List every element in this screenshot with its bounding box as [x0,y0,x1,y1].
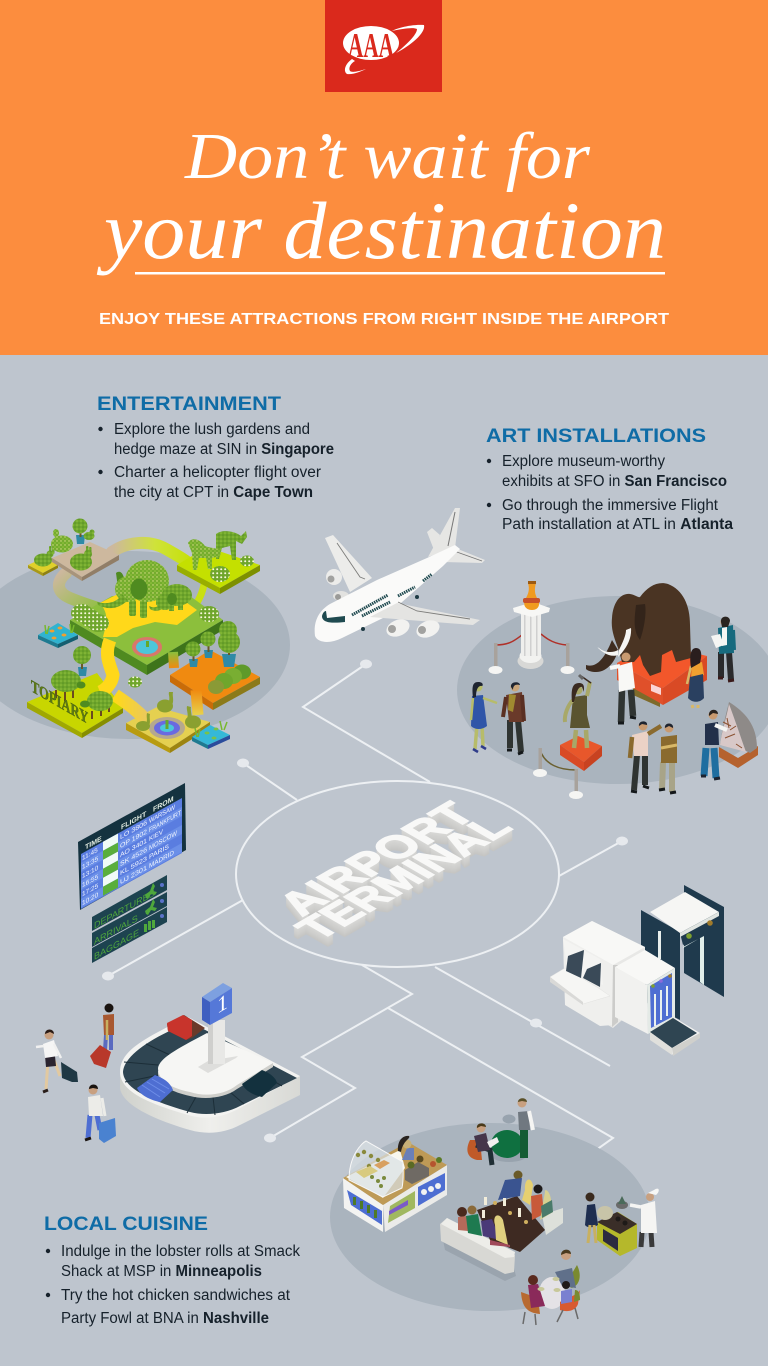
title: your destination [97,185,666,276]
panel: topiary garden [0,518,290,753]
title [97,120,666,276]
wayfinding signs: DEPARTURES [94,888,155,932]
flight departures board: 13:35 [82,856,98,871]
panel: food court [330,1098,659,1325]
flight departures board [78,783,186,910]
flight departures board: FRANKFURT [149,810,182,834]
flight departures board: AO 3401 [120,838,147,859]
wayfinding signs: BAGGAGE [94,927,139,963]
mammoth plinth [617,643,707,707]
art backdrop ellipse [457,596,768,784]
food backdrop ellipse [330,1123,650,1311]
text block: art installations: exhibits at SFO in San Francisco [502,473,727,490]
visitor: man at rock [701,710,727,779]
cavewoman statue on plinth [560,675,602,771]
airplane [315,508,485,642]
text block: local cuisine [44,1214,300,1327]
waiter and green table [467,1098,533,1165]
header band [0,0,768,355]
flight departures board: 11:45 [82,847,98,862]
flight departures board: OP 1902 [120,829,147,850]
flight departures board: 16:55 [82,874,98,889]
horse platform [177,547,260,588]
column with vase [513,581,550,669]
flight departures board: MADRID [149,850,174,870]
text block: local cuisine: LOCAL CUISINE [44,1214,208,1235]
flight departures board: FLIGHT [121,809,147,832]
panel: art installations [457,581,768,799]
text block: art installations: Path installation at ATL in Atlanta [502,516,733,533]
text block: entertainment: hedge maze at SIN in Singapore [114,441,334,458]
text block: art installations: ART INSTALLATIONS [486,426,706,447]
metal detector gate [641,885,724,1020]
elephants [97,560,192,618]
visitor: woman in orange top [687,648,704,708]
subtitle: ENJOY THESE ATTRACTIONS FROM RIGHT INSIDE THE AIRPORT [99,311,669,328]
family table [521,1250,580,1325]
water tiles [38,623,230,749]
rabbits [34,529,94,570]
group table on sofas [440,1170,563,1281]
flight departures board: 13:10 [82,865,98,880]
isometric label: airport: AIRPORT [266,795,486,922]
topiary ducks [136,692,201,731]
bakery counter [343,1136,447,1232]
text block: art installations [486,426,733,533]
flight departures board: 10:20 [82,892,98,907]
flight departures board: 17:25 [82,883,98,898]
text block: entertainment: Charter a helicopter flight over [114,464,321,481]
text block: local cuisine: Try the hot chicken sandwiches at [61,1287,291,1304]
security x-ray and gate [550,885,724,1056]
visitor: man in teal jacket [711,617,734,681]
orange platform [170,650,260,703]
bushes and trees [71,518,254,694]
flight departures board: MOSCOW [149,830,177,852]
title: Don’t wait for [184,120,590,193]
flight departures board: PARIS [149,843,169,861]
flight departures board: WARSAW [149,804,175,825]
AAA logo: AAA [348,26,394,65]
stanchions and ropes [488,634,583,799]
text block: entertainment: ENTERTAINMENT [97,394,281,415]
traveler: man with blue suitcase [85,1084,116,1143]
text block: art installations: Go through the immersive Flight [502,497,719,514]
text block: local cuisine: Indulge in the lobster rolls at Smack [61,1243,300,1260]
traveler: woman with dark suitcase [36,1030,78,1092]
x-ray scanner body [563,921,645,1028]
carousel pole and number sign [198,983,238,1073]
flight departures board: KIEV [149,829,163,843]
text block: entertainment: the city at CPT in Cape Town [114,484,313,501]
text block: entertainment: Explore the lush gardens and [114,421,310,438]
sheep [51,670,113,719]
rabbit platform [28,542,119,581]
baggage carousel [120,983,300,1133]
central lawn platform [70,596,223,665]
visitor: woman in blue [471,682,497,752]
flight departures board: TIME [85,834,102,852]
connector dots [102,660,628,1174]
visitors: pointing man and companion [630,721,677,793]
bags on belt [137,1015,277,1102]
carousel pole and number sign: 1 [217,989,228,1020]
garden backdrop ellipse [0,551,290,739]
yellow elephant pad [100,587,197,637]
flight departures board: KL 5923 [120,856,147,877]
topiary sheep platform [27,673,123,733]
wayfinding signs: ARRIVALS [94,913,138,948]
connector lines [108,664,622,1170]
rock art exhibit [719,702,758,768]
chef and stove [585,1189,659,1256]
text block: entertainment [97,394,334,501]
flight departures board: UJ 2301 [120,865,147,886]
flight departures board: FROM [153,794,174,814]
isometric label: terminal: TERMINAL [286,810,522,946]
flight departures board: SK 4526 [120,847,147,868]
wayfinding signs [92,875,167,963]
text block: local cuisine: Shack at MSP in Minneapolis [61,1263,262,1280]
visitor: man in brown jacket [503,682,524,754]
text block: local cuisine: Party Fowl at BNA in Nashville [61,1310,269,1327]
garden lower paths [115,652,198,720]
garden paths [59,543,205,610]
text block: art installations: Explore museum-worthy [502,453,665,470]
AAA logo [325,0,442,92]
flight departures board: LO 3806 [120,820,147,841]
horses [188,531,247,570]
topiary word: TOPIARY [31,676,88,728]
duck platform [126,707,210,748]
traveler: woman with red suitcase [90,1004,114,1068]
ponds [132,637,185,739]
mammoth [586,583,691,676]
visitor: man in white shirt [610,652,636,723]
